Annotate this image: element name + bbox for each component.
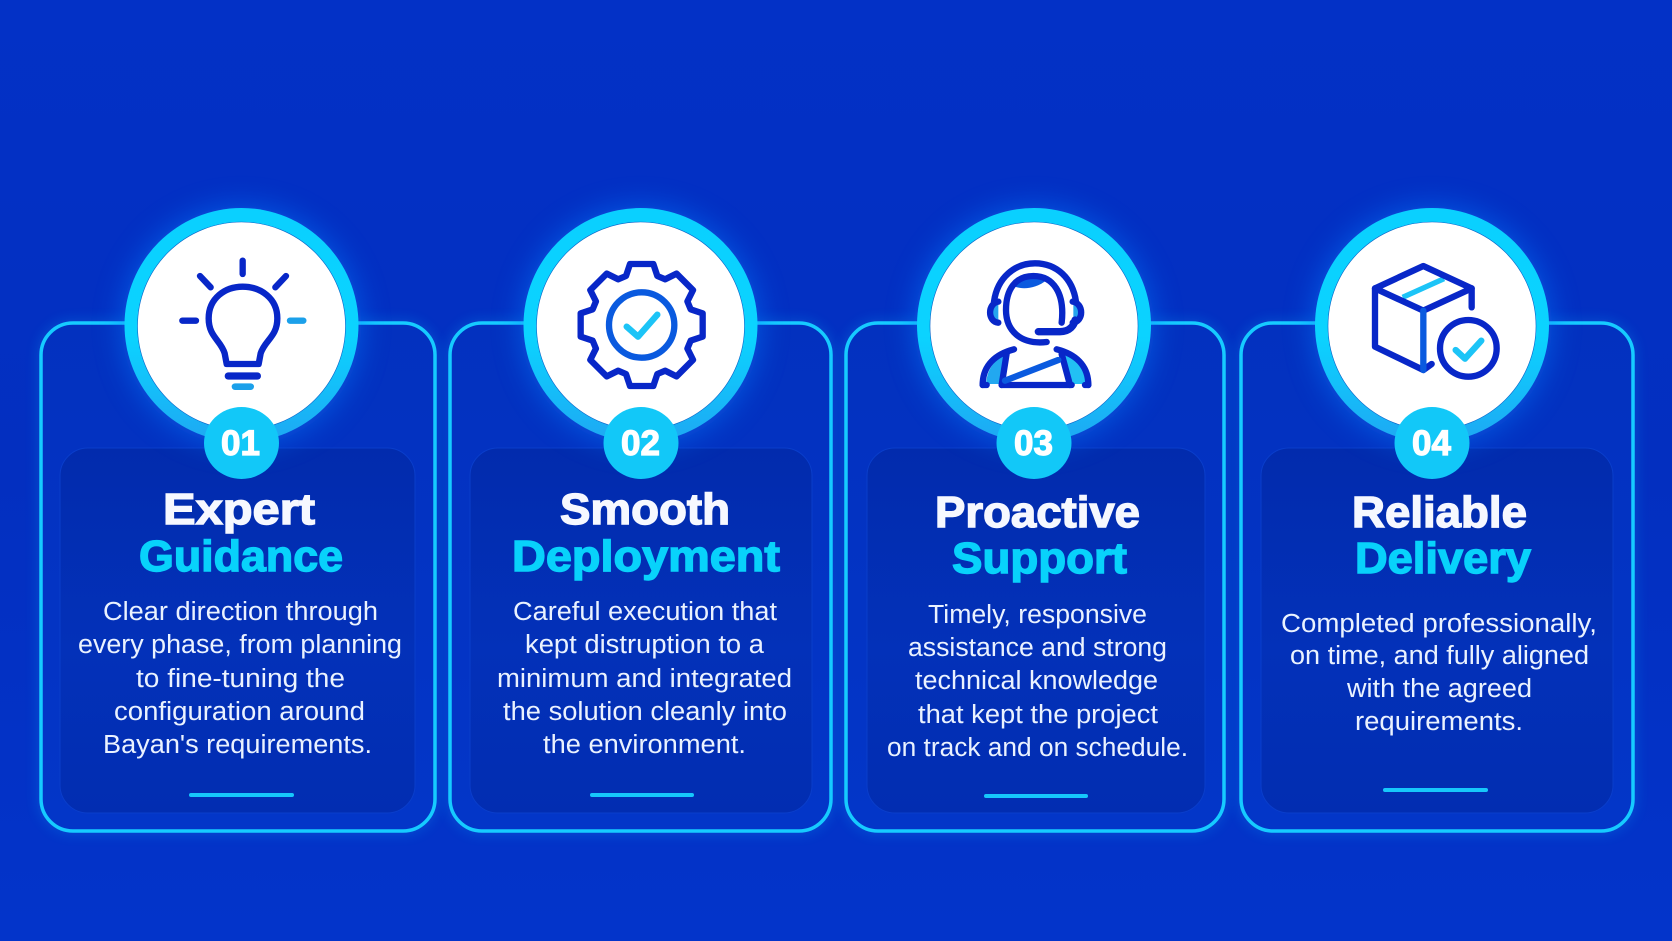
panel: 02 Smooth Deployment <box>450 206 831 831</box>
heading: Deployment <box>512 532 780 581</box>
heading <box>1352 488 1532 583</box>
heading: Expert <box>163 485 315 534</box>
body text: with the agreed <box>1346 675 1532 703</box>
body text: Bayan's requirements. <box>103 731 372 759</box>
number badge 01 <box>204 407 279 479</box>
icon: package with check <box>1375 266 1497 377</box>
card outline <box>450 323 831 831</box>
panel: 01 Expert Guidance <box>41 206 435 831</box>
body text: requirements. <box>1355 708 1523 736</box>
card outline <box>1241 323 1633 831</box>
body text: kept distruption to a <box>525 631 765 659</box>
icon: light bulb <box>182 261 303 387</box>
body text <box>1281 610 1597 736</box>
number badge 02: 02 <box>621 424 660 463</box>
body text: the solution cleanly into <box>503 698 787 726</box>
divider <box>1383 788 1488 792</box>
divider <box>189 793 294 797</box>
inner panel <box>867 448 1205 813</box>
body text: technical knowledge <box>915 667 1158 695</box>
body text: minimum and integrated <box>497 665 792 693</box>
body text: every phase, from planning <box>78 631 402 659</box>
icon badge: box <box>1315 208 1549 442</box>
number badge 02 <box>604 407 678 479</box>
inner panel <box>470 448 812 813</box>
body text <box>497 598 792 759</box>
body text: the environment. <box>543 731 746 759</box>
number badge 04: 04 <box>1412 424 1451 463</box>
heading: Support <box>952 534 1127 583</box>
divider <box>984 794 1088 798</box>
icon badge: light bulb <box>124 208 358 442</box>
inner panel <box>60 448 415 813</box>
body text <box>887 601 1188 762</box>
heading <box>512 485 780 581</box>
icon badge: gear <box>524 208 758 442</box>
heading: Delivery <box>1355 534 1532 583</box>
icon badge: headset agent <box>917 208 1151 442</box>
body text: that kept the project <box>918 701 1158 729</box>
heading <box>139 485 343 581</box>
heading: Reliable <box>1352 488 1527 537</box>
body text: configuration around <box>114 698 365 726</box>
body text: assistance and strong <box>908 634 1167 662</box>
panel: 03 Proactive Support <box>846 206 1224 831</box>
heading: Smooth <box>560 485 730 534</box>
body text: Completed professionally, <box>1281 610 1597 638</box>
heading <box>935 488 1140 583</box>
body text: Clear direction through <box>103 598 378 626</box>
body text: to fine-tuning the <box>136 665 345 693</box>
body text: Timely, responsive <box>928 601 1147 629</box>
card outline <box>41 323 435 831</box>
divider <box>590 793 694 797</box>
icon: support agent with headset <box>983 263 1088 385</box>
number badge 03: 03 <box>1014 424 1053 463</box>
heading: Guidance <box>139 532 343 581</box>
panel: 04 Reliable Delivery <box>1241 206 1633 831</box>
number badge 04 <box>1394 407 1470 479</box>
card outline <box>846 323 1224 831</box>
body text: on track and on schedule. <box>887 734 1188 762</box>
body text: on time, and fully aligned <box>1290 642 1589 670</box>
number badge 01: 01 <box>221 424 260 463</box>
number badge 03 <box>996 407 1072 479</box>
heading: Proactive <box>935 488 1140 537</box>
body text: Careful execution that <box>513 598 777 626</box>
inner panel <box>1261 448 1613 813</box>
icon: gear with check <box>581 264 703 386</box>
body text <box>78 598 402 759</box>
